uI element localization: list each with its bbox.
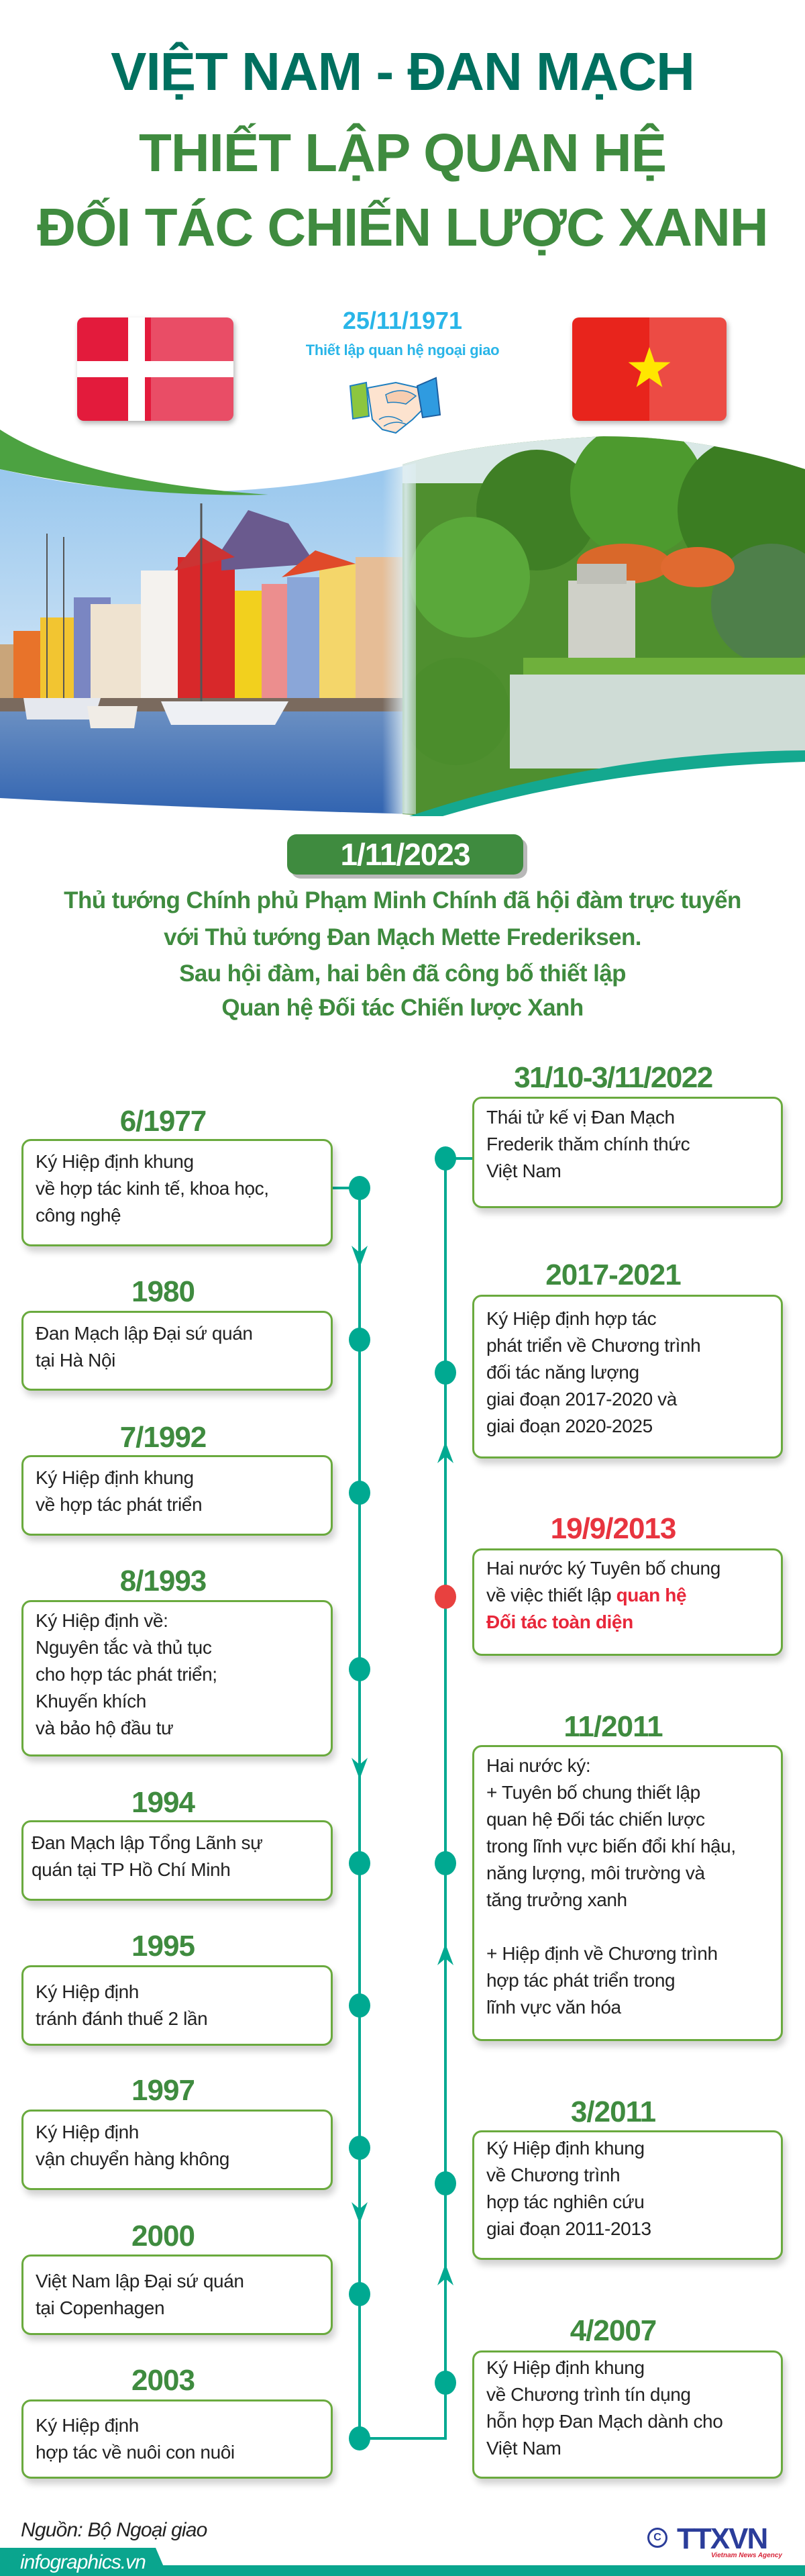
event 2017-2021: đối tác năng lượng (486, 1362, 639, 1383)
event 1980 (21, 1275, 338, 1399)
event 6/1977: 6/1977 (120, 1105, 206, 1138)
event 3/2011 (472, 2095, 788, 2268)
event 1994 (21, 1786, 338, 1909)
event 2003 (21, 2364, 338, 2487)
event 1997 (21, 2074, 338, 2198)
event 2017-2021: Ký Hiệp định hợp tác (486, 1308, 656, 1329)
event 31/10-3/11/2022: Việt Nam (486, 1160, 561, 1181)
event 19/9/2013 (highlight): Đối tác toàn diện (486, 1612, 633, 1632)
event 2000: 2000 (131, 2220, 195, 2252)
icon: handshake (349, 377, 441, 434)
photo: Copenhagen and Hanoi (0, 430, 805, 816)
event 8/1993: Khuyến khích (36, 1690, 146, 1712)
logo: TTXVN: TTXVN (677, 2522, 767, 2555)
event 3/2011: giai đoạn 2011-2013 (486, 2218, 651, 2239)
event 1994: quán tại TP Hồ Chí Minh (32, 1859, 230, 1880)
event 11/2011: Hai nước ký: (486, 1754, 590, 1776)
event 8/1993 (21, 1565, 338, 1765)
event 1997: Ký Hiệp định (36, 2122, 139, 2142)
event 1995: 1995 (131, 1930, 195, 1963)
event 4/2007: hỗn hợp Đan Mạch dành cho (486, 2411, 722, 2431)
event 1980: 1980 (131, 1275, 195, 1308)
event 3/2011: về Chương trình (486, 2164, 620, 2185)
event 2000: Việt Nam lập Đại sứ quán (36, 2271, 244, 2291)
main statement paragraph: Quan hệ Đối tác Chiến lược Xanh (221, 995, 584, 1021)
event 11/2011: lĩnh vực văn hóa (486, 1996, 621, 2018)
event 19/9/2013 (highlight): 19/9/2013 (551, 1512, 676, 1545)
event 1980: tại Hà Nội (36, 1349, 115, 1371)
event 1995 (21, 1930, 338, 2054)
event 2003: Ký Hiệp định (36, 2415, 139, 2436)
event 2017-2021: giai đoạn 2020-2025 (486, 1416, 653, 1436)
event 31/10-3/11/2022: Thái tử kế vị Đan Mạch (486, 1107, 675, 1128)
event 4/2007: Ký Hiệp định khung (486, 2357, 645, 2377)
event 2003: hợp tác về nuôi con nuôi (36, 2442, 235, 2463)
event 11/2011: 11/2011 (564, 1710, 663, 1743)
event 1994: 1994 (131, 1786, 195, 1819)
event 19/9/2013 (highlight): Hai nước ký Tuyên bố chung (486, 1558, 720, 1579)
event 2017-2021 (472, 1258, 788, 1467)
event 31/10-3/11/2022: Frederik thăm chính thức (486, 1134, 690, 1154)
logo: TTXVN: Vietnam News Agency (711, 2552, 782, 2559)
flag: Vietnam (572, 317, 727, 421)
title line 2: THIẾT LẬP QUAN HỆ (139, 123, 666, 183)
event 8/1993: cho hợp tác phát triển; (36, 1663, 217, 1685)
main statement paragraph: Thủ tướng Chính phủ Phạm Minh Chính đã hội đàm trực tuyến (64, 887, 741, 913)
main statement paragraph (64, 887, 741, 1021)
event 4/2007: 4/2007 (570, 2314, 656, 2347)
event 3/2011: 3/2011 (571, 2095, 655, 2128)
main statement paragraph: Sau hội đàm, hai bên đã công bố thiết lập (179, 960, 626, 987)
event 31/10-3/11/2022: 31/10-3/11/2022 (514, 1061, 712, 1094)
event 19/9/2013 (highlight) (472, 1512, 788, 1664)
event 2017-2021: phát triển về Chương trình (486, 1335, 700, 1356)
event 1995: tránh đánh thuế 2 lần (36, 2008, 207, 2029)
event 2000 (21, 2220, 338, 2343)
title line 3: ĐỐI TÁC CHIẾN LƯỢC XANH (37, 197, 768, 257)
website text: infographics.vn (20, 2551, 146, 2573)
event 19/9/2013 (highlight): về việc thiết lập quan hệ (486, 1585, 686, 1605)
source note: Nguồn: Bộ Ngoại giao (21, 2519, 207, 2541)
date pill 1/11/2023: 1/11/2023 (340, 837, 470, 872)
event 7/1992 (21, 1421, 338, 1544)
event 7/1992: 7/1992 (120, 1421, 206, 1454)
event 11/2011: + Tuyên bố chung thiết lập (486, 1781, 700, 1803)
event 1995: Ký Hiệp định (36, 1981, 139, 2002)
footer bar (0, 2548, 805, 2576)
event 2017-2021: 2017-2021 (545, 1258, 681, 1291)
event 8/1993: và bảo hộ đầu tư (36, 1717, 173, 1738)
event 3/2011: hợp tác nghiên cứu (486, 2191, 644, 2212)
event 8/1993: Nguyên tắc và thủ tục (36, 1636, 211, 1658)
event 4/2007: về Chương trình tín dụng (486, 2384, 691, 2404)
event 2017-2021: giai đoạn 2017-2020 và (486, 1389, 677, 1409)
event 6/1977: công nghệ (36, 1205, 121, 1226)
event 7/1992: về hợp tác phát triển (36, 1494, 202, 1515)
logo: TTXVN (647, 2522, 782, 2559)
event 6/1977: Ký Hiệp định khung (36, 1151, 194, 1172)
date pill 1/11/2023 (287, 834, 527, 879)
title (37, 42, 768, 257)
event 11/2011: + Hiệp định về Chương trình (486, 1942, 718, 1964)
event 6/1977 (21, 1105, 338, 1254)
subtitle: establish diplomatic relations: Thiết lập quan hệ ngoại giao (306, 342, 499, 358)
event 11/2011: tăng trưởng xanh (486, 1889, 627, 1910)
event 8/1993: 8/1993 (120, 1565, 206, 1597)
event 11/2011: hợp tác phát triển trong (486, 1969, 675, 1991)
event 11/2011: trong lĩnh vực biến đổi khí hậu, (486, 1835, 736, 1856)
event 11/2011: năng lượng, môi trường và (486, 1862, 705, 1883)
event 8/1993: Ký Hiệp định về: (36, 1609, 168, 1631)
event 1994: Đan Mạch lập Tổng Lãnh sự (32, 1832, 262, 1853)
event 4/2007: Việt Nam (486, 2438, 561, 2458)
event 31/10-3/11/2022 (472, 1061, 788, 1216)
event 1980: Đan Mạch lập Đại sứ quán (36, 1322, 253, 1344)
event 2000: tại Copenhagen (36, 2297, 164, 2318)
date 1971: 25/11/1971 (343, 307, 462, 334)
event 7/1992: Ký Hiệp định khung (36, 1467, 194, 1488)
event 4/2007 (472, 2314, 788, 2487)
event 6/1977: về hợp tác kinh tế, khoa học, (36, 1178, 269, 1199)
event 1997: 1997 (131, 2074, 195, 2107)
main statement paragraph: với Thủ tướng Đan Mạch Mette Frederiksen. (164, 924, 641, 950)
logo: TTXVN: C (653, 2532, 661, 2543)
event 11/2011 (472, 1710, 788, 2049)
event 1997: vận chuyển hàng không (36, 2148, 229, 2169)
event 2003: 2003 (131, 2364, 195, 2397)
event 3/2011: Ký Hiệp định khung (486, 2137, 645, 2159)
title line 1: VIỆT NAM - ĐAN MẠCH (111, 42, 694, 101)
event 11/2011: quan hệ Đối tác chiến lược (486, 1808, 705, 1830)
flag: Denmark (77, 317, 233, 421)
